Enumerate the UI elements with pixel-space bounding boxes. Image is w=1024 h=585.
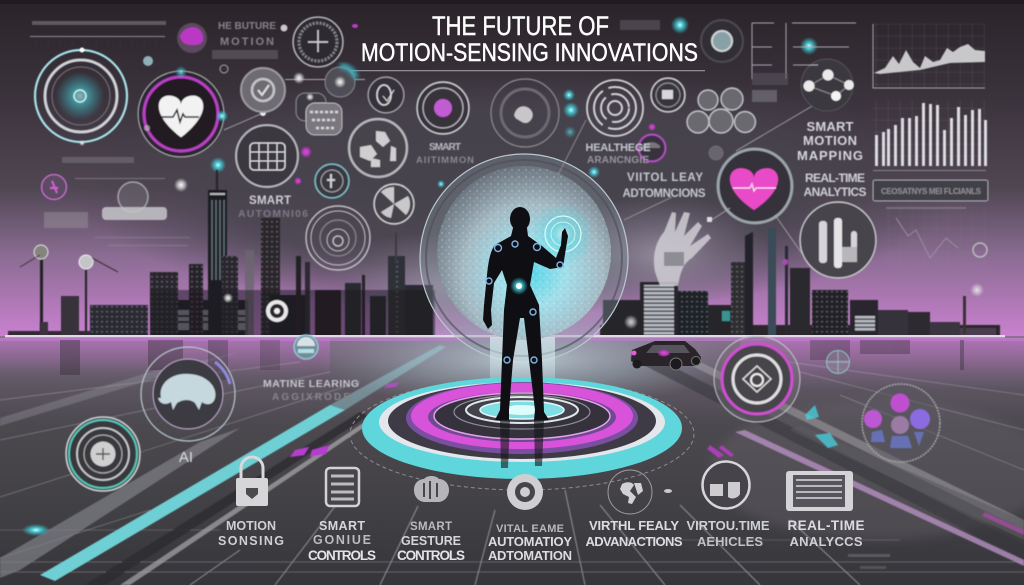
icon: hexagon cluster [687, 88, 756, 133]
icon: gear group [296, 93, 342, 135]
label: smart automation 2: SMART [249, 195, 291, 207]
joint lights [486, 241, 563, 363]
feature: virtual reality advancements [586, 470, 683, 549]
leg reflection [500, 420, 544, 468]
icon: big cyan ring [35, 48, 127, 146]
icon: fragments [349, 119, 407, 177]
bottom feature row [218, 457, 864, 563]
area chart [873, 24, 985, 88]
icon: light link [285, 66, 365, 97]
glow pink [294, 146, 312, 185]
label: machine learning: AGGIXRODE [272, 392, 350, 403]
label: smart motion mapping: MOTION [803, 133, 857, 148]
label: healthcare [586, 142, 650, 166]
ghost label [212, 21, 278, 59]
skyline right [600, 228, 1000, 336]
feature: smart gesture controls: GESTURE [401, 534, 461, 548]
feature: virtual game automation [488, 474, 572, 563]
feature: virtual vehicles: AEHICLES [697, 534, 763, 549]
icon: small cyan dome [294, 335, 318, 359]
skyline left [8, 170, 435, 336]
ground hud [66, 335, 940, 569]
top right bars panel [752, 23, 856, 102]
glow cyan [210, 157, 226, 173]
icon: spiral [558, 80, 643, 175]
icon: magenta blob [177, 23, 207, 53]
icon: fingers ring [800, 202, 876, 278]
ghost label: HE BUTURE [218, 21, 276, 32]
label: machine learning [263, 378, 359, 403]
label: smart automation 2: AUTOMNI06 [238, 208, 308, 220]
car [631, 341, 701, 370]
icon: cross dial [293, 17, 343, 67]
label: smart motion mapping: MAPPING [797, 148, 863, 163]
title [350, 11, 705, 71]
label: machine learning: MATINE LEARING [263, 378, 359, 390]
figure silhouette [483, 207, 568, 420]
icon: magenta dial [417, 82, 469, 134]
feature: smart gesture controls [397, 476, 465, 563]
right upper hud [491, 16, 988, 290]
bottom right grid [886, 205, 987, 290]
label: smart automation [416, 142, 474, 166]
lamp posts [20, 245, 118, 335]
label: real-time analytics: REAL-TIME [805, 171, 865, 185]
icon: small check ring [651, 78, 685, 112]
label: smart motion mapping: SMART [806, 119, 854, 134]
icon: center dial [491, 79, 559, 147]
title: MOTION-SENSING INNOVATIONS [361, 39, 698, 67]
feature: motion sensing: SONSING [218, 534, 284, 548]
cyan light trail [40, 405, 345, 581]
label: virtual reality: VIITOL LEAY [627, 172, 703, 184]
metrics box [873, 180, 988, 201]
icon: motion map nodes [801, 59, 854, 111]
icon: tool ring [315, 164, 349, 198]
label: smart automation: AIITIMMON [416, 155, 474, 166]
icon: concentric ring [306, 206, 370, 270]
feature: smart genuine controls: GONIUE [313, 533, 371, 547]
label: smart automation 2 [238, 195, 308, 220]
label: healthcare: ARANCNGIE [587, 155, 649, 166]
bar chart [873, 100, 987, 171]
top left data text [30, 21, 166, 47]
icon: teal ring [66, 417, 140, 491]
icon: grid [236, 125, 298, 187]
body [483, 228, 568, 420]
feature: motion sensing: MOTION [226, 519, 276, 533]
right road [630, 350, 1024, 560]
feature: virtual game automation: VITAL EAME [496, 523, 564, 535]
feature: smart genuine controls [308, 468, 376, 563]
icon: check dial [368, 77, 404, 113]
label: AI: AI [179, 449, 193, 466]
bottom text lines [848, 554, 890, 569]
tall tower [208, 170, 227, 336]
feature: real-time analytics: REAL-TIME [788, 518, 864, 533]
icon: lens dial [701, 20, 743, 62]
feature: virtual vehicles: VIRTOU.TIME [686, 518, 770, 533]
title: THE FUTURE OF [432, 11, 609, 41]
label: smart motion mapping [797, 119, 863, 163]
label: healthcare: HEALTHEGE [586, 142, 650, 154]
label: real-time analytics: ANALYTICS [804, 185, 866, 199]
icon: magenta ring [714, 336, 800, 422]
feature: motion sensing [218, 457, 284, 548]
icon: clock segments [374, 184, 414, 224]
feature: virtual reality advancements: ADVANACTIONS [586, 534, 683, 549]
horizon line [0, 335, 1024, 380]
ground grid and light trails [0, 345, 1024, 585]
icon: AI brain ring [141, 347, 235, 441]
icon: cyan lights [563, 16, 818, 178]
label: smart automation: SMART [429, 142, 461, 153]
platform [350, 377, 694, 490]
dots [143, 24, 358, 131]
feature: real-time analytics [786, 471, 864, 549]
sphere hologram [420, 154, 628, 385]
upper left hud [20, 17, 474, 335]
icon: purple ring [638, 134, 723, 162]
icon: pink heart [707, 92, 836, 265]
metrics box: CEOSATNYS MEI FLCIANLS [881, 187, 982, 196]
icon: white heart rate [138, 66, 266, 157]
feature: smart genuine controls: SMART [319, 519, 365, 533]
feature: smart gesture controls: CONTROLS [397, 548, 465, 563]
icon: small hologram [826, 350, 850, 374]
feature: smart genuine controls: CONTROLS [308, 548, 376, 563]
panel: left hologram [42, 157, 190, 246]
label: virtual reality [622, 172, 706, 220]
feature: virtual reality advancements: VIRTHL FEALY [589, 518, 679, 533]
feature: smart gesture controls: SMART [410, 521, 452, 533]
icon: texture disc [241, 68, 285, 112]
feature: virtual game automation: ADTOMATION [488, 548, 572, 563]
feature: real-time analytics: ANALYCCS [790, 534, 863, 549]
label: real-time analytics [804, 171, 866, 199]
label: virtual reality: ADTOMNCIONS [622, 188, 706, 200]
ghost label: MOTION [220, 36, 274, 48]
icon: hand [654, 212, 711, 286]
icon: orb group [862, 384, 940, 462]
feature: virtual game automation: AUTOMATIOY [488, 534, 572, 549]
feature: virtual vehicles [686, 462, 770, 549]
